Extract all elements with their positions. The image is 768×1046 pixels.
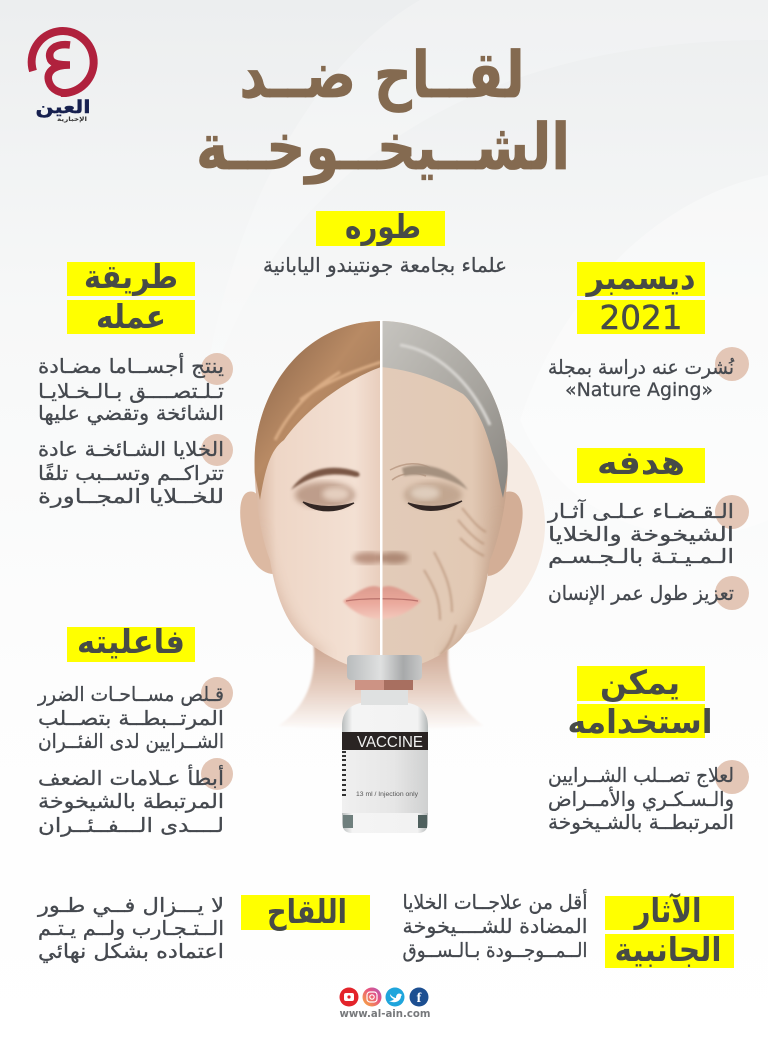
logo: Al-Ain [32,31,94,123]
panel: possible uses: والـسـكـري والأمــراض [548,787,734,812]
panel: date and publication [548,258,749,401]
panel: possible uses: لعلاج تصــلب الشــرايين [548,763,734,787]
panel: side effects: الآثار [633,891,702,930]
vaccine vial: 13 ml / Injection only [356,792,418,798]
panel: goal: هدفه [597,443,685,482]
nose [353,552,383,564]
panel: possible uses: يمكن [600,663,680,703]
panel: possible uses [548,663,749,834]
title: الشــيخــوخــة [196,111,570,185]
panel: side effects: الــمــوجــودة بـالـســوق [402,938,588,962]
panel: developer stage [263,207,507,277]
title [196,39,570,185]
panel: goal: الشيخوخة والخلايا [548,522,734,546]
panel: effectiveness [37,622,233,837]
face skin [250,320,512,680]
social icons and website: f [417,991,422,1006]
illustration: half young, half aged face [240,320,523,729]
panel: the vaccine status: لا يـــزال فــي طـور [37,893,224,918]
panel: how it works: الخلايا الشـائخـة عادة [38,437,224,461]
panel: possible uses: استخدامه [568,702,712,741]
title: لقــاح ضــد [240,39,524,113]
panel: date and publication: ديسمبر [585,258,696,298]
panel: side effects [402,889,734,969]
panel: goal: الـقـضـاء عـلـى آثـار [547,498,734,523]
panel: goal [547,443,749,610]
vaccine vial [342,655,428,833]
panel: how it works: تتراكــم وتســبب تلفًا [38,461,224,485]
panel: effectiveness: المرتــبطــة بتصــلب [38,706,224,730]
right ear [488,492,523,576]
cheek and wrinkle shading [268,555,326,654]
panel: the vaccine status: الــتـجـارب ولــم يـتـم [38,916,224,940]
vaccine vial: VACCINE [357,734,423,751]
panel: the vaccine status: اعتماده بشكل نهائي [38,939,224,964]
logo: Al-Ain: الإخبارية [57,116,87,123]
panel: goal: تعزيز طول عمر الإنسان [548,581,734,605]
eyes [303,502,354,511]
panel: date and publication: 2021 [600,298,682,337]
panel: date and publication: نُشرت عنه دراسة بمجلة [548,355,734,379]
panel: how it works [38,257,233,508]
panel: side effects: المضادة للشــــيخوخة [402,914,588,938]
panel: effectiveness: أبطأ عـلامات الضعف [38,764,224,790]
panel: the vaccine status [37,892,370,964]
panel: developer stage: علماء بجامعة جونتيندو اليابانية [263,253,507,277]
panel: possible uses: المرتبطــة بالشـيخوخة [548,810,734,834]
panel: effectiveness: المرتبطة بالشيخوخة [38,789,224,813]
panel: date and publication: «Nature Aging» [565,379,713,401]
social icons and website [340,988,430,1020]
panel: how it works: للخــلايا المجــاورة [38,484,224,508]
panel: how it works: طريقة [84,257,178,297]
left ear [240,492,278,574]
logo: Al-Ain: العين [36,97,90,118]
panel: how it works: عمله [96,297,166,336]
divider line [380,320,382,656]
panel: how it works: ينتج أجســاما مضـادة [38,353,224,378]
brows [291,468,360,490]
panel: effectiveness: قـلص مســاحـات الضرر [37,682,224,706]
social icons and website: www.al-ain.com [340,1007,430,1020]
lips [343,586,421,619]
panel: how it works: تـلـتصــــق بـالـخـلايـا [38,379,224,403]
panel: side effects: الجانبية [614,930,722,969]
panel: effectiveness: فاعليته [77,622,185,661]
panel: side effects: أقل من علاجــات الخلايا [402,889,588,914]
panel: goal: الـمـيـتـة بالـجـسـم [548,544,734,568]
panel: the vaccine status: اللقاح [267,892,347,931]
panel: effectiveness: لــــدى الـــفــئــران [38,813,224,837]
panel: developer stage: طوره [345,207,421,247]
eye shadow [295,482,355,508]
panel: effectiveness: الشــرايين لدى الفئــران [38,729,224,753]
panel: how it works: الشائخة وتقضي عليها [38,401,224,426]
